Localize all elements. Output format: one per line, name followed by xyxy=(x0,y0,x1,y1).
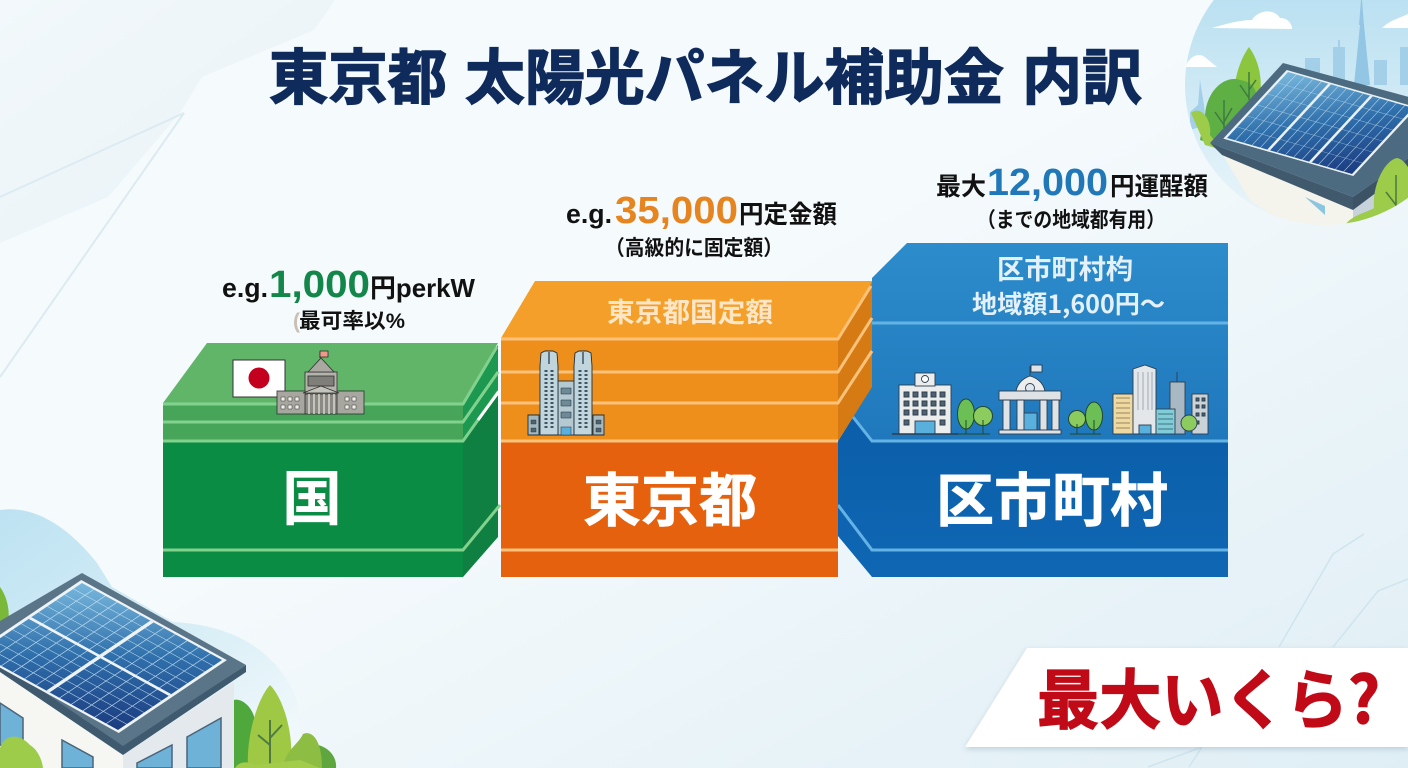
title: 太陽光パネル補助金 xyxy=(465,30,1004,117)
illustration: house with solar panels xyxy=(0,509,336,768)
amount label: Tokyo xyxy=(566,190,837,260)
title: 内訳 xyxy=(1022,30,1142,117)
amount label: national: ( xyxy=(293,310,300,333)
roof xyxy=(1223,156,1353,225)
amount label: municipalities: 12,000 xyxy=(987,162,1108,204)
label: 国: 国 xyxy=(282,451,342,538)
solar panel xyxy=(1223,70,1408,176)
amount label: Tokyo: e.g. xyxy=(566,199,612,229)
amount label: Tokyo: 35,000 xyxy=(615,190,738,232)
amount label: municipalities: （までの地域都有用） xyxy=(977,209,1165,232)
block: green stack xyxy=(163,343,500,577)
amount label: national: 円perkW xyxy=(370,273,475,303)
icon: trees right xyxy=(1068,402,1102,434)
text: municipal top label: 地域額1,600円～ xyxy=(972,285,1165,321)
icon: skyline xyxy=(1113,365,1208,434)
block: blue stack xyxy=(838,243,1228,577)
title: 東京都 xyxy=(269,30,447,117)
text: municipal top label xyxy=(972,248,1165,321)
icon: trees left xyxy=(958,399,992,434)
amount label: national: e.g. xyxy=(222,273,268,303)
amount label: municipalities: 最大 xyxy=(936,173,986,201)
label: 区市町村: 区市町村 xyxy=(936,454,1168,538)
icon: Tokyo Metropolitan Government Building xyxy=(528,351,604,435)
amount label: municipalities xyxy=(936,162,1208,232)
callout: maximum amount question: 最大いくら? xyxy=(1037,648,1380,742)
amount label: national: 最可率以% xyxy=(299,310,405,333)
tier: Tokyo Metropolitan xyxy=(501,190,872,577)
block: orange stack xyxy=(501,281,872,577)
label: 東京都: 東京都 xyxy=(583,454,757,538)
icon: Japanese flag xyxy=(233,360,285,397)
amount label: Tokyo: （高級的に固定額） xyxy=(605,237,783,260)
wall xyxy=(0,672,123,768)
icon: office building xyxy=(892,373,958,434)
text: municipal top label: 区市町村枃 xyxy=(997,248,1133,287)
label: Tokyo fixed amount: 東京都国定額 xyxy=(607,291,773,330)
amount label: municipalities: 円運酲額 xyxy=(1110,173,1208,201)
icon: city hall xyxy=(999,365,1061,434)
amount label: national xyxy=(222,264,475,333)
tier: municipalities xyxy=(838,162,1228,577)
trees xyxy=(234,700,290,768)
icon: National Diet building xyxy=(277,351,364,414)
title xyxy=(269,30,1142,117)
illustration: rooftop solar and Tokyo skyline xyxy=(1180,0,1408,240)
tier: national government xyxy=(163,264,500,577)
solar panel xyxy=(0,580,227,733)
amount label: Tokyo: 円定金額 xyxy=(739,201,837,229)
amount label: national: 1,000 xyxy=(269,264,370,306)
